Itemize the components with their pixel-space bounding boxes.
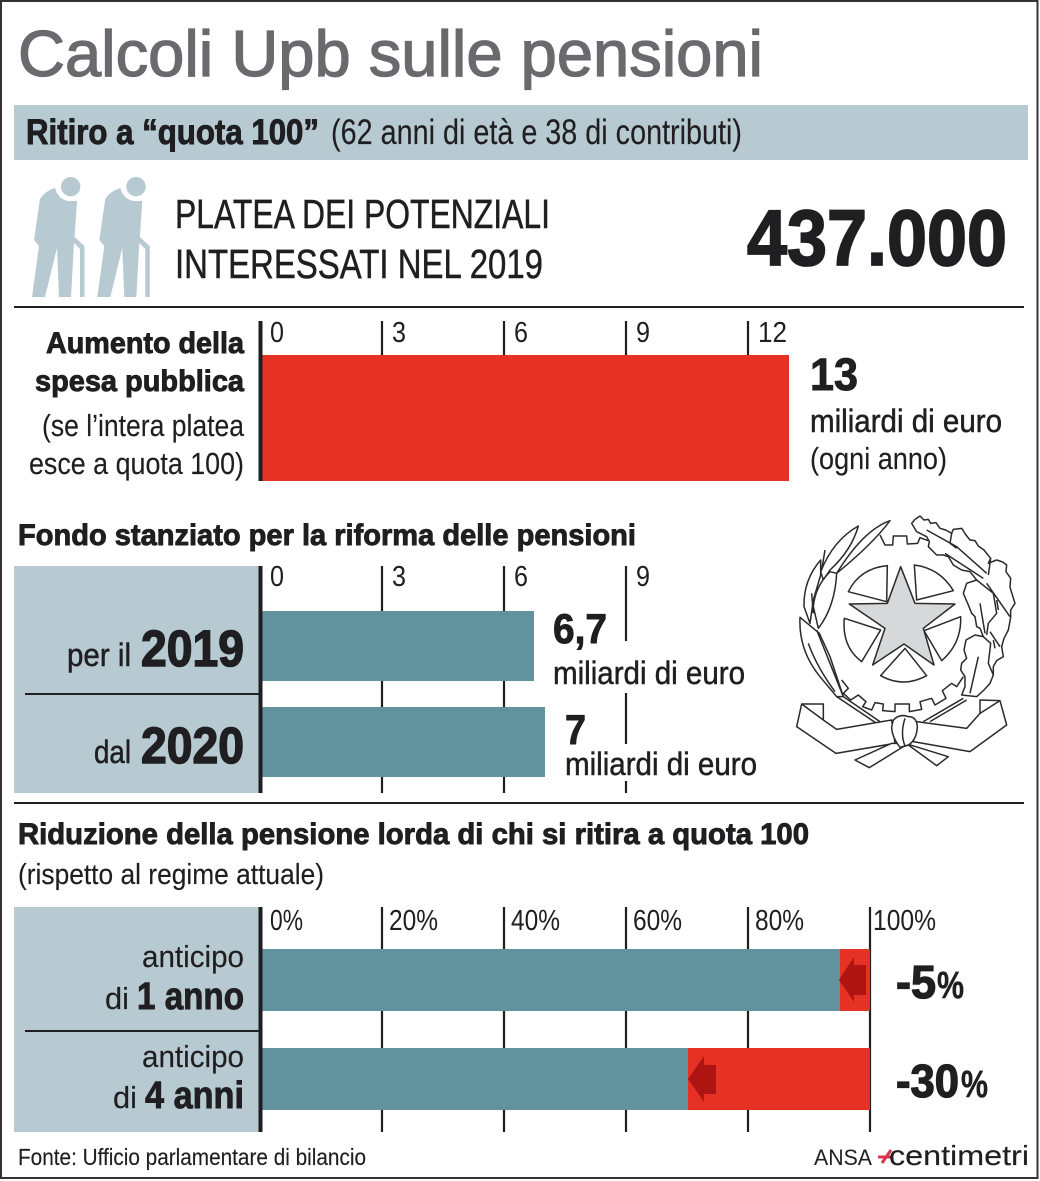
value: 13 miliardi: (ogni anno) — [810, 441, 947, 476]
panel: anticipo labels: 1 anno — [137, 976, 244, 1018]
value: 6,7 miliardi — [553, 605, 745, 691]
value: -30%: % — [961, 1064, 988, 1106]
title: Calcoli Upb sulle pensioni — [18, 17, 763, 90]
bar chart: fondo: 3 — [392, 561, 406, 593]
big number: 437.000 — [747, 193, 1007, 282]
bar chart: riduzione pensione: 100% — [873, 905, 936, 937]
heading: riduzione della pensione — [18, 818, 809, 891]
logo: ANSA Centimetri: centimetri — [889, 1140, 1029, 1171]
value: 13 miliardi — [810, 349, 1002, 476]
value: -5%: -5 — [896, 956, 936, 1008]
bar chart: spesa pubblica — [260, 317, 789, 481]
subtitle band: Ritiro a “quota 100” — [26, 113, 319, 152]
heading: riduzione della pensione: Riduzione della pensione lorda di chi si ritira a quota 100 — [18, 818, 809, 851]
bar chart: fondo: 0 — [270, 561, 284, 593]
text block: aumento della spesa pubblica: Aumento della — [46, 327, 244, 360]
panel: anticipo labels: di — [105, 981, 129, 1016]
subtitle band — [14, 105, 1028, 160]
bar chart: riduzione pensione — [260, 905, 936, 1132]
text block: aumento della spesa pubblica: (se l’intera platea — [42, 408, 245, 443]
bar chart: spesa pubblica: 3 — [392, 317, 406, 349]
text block: aumento della spesa pubblica: spesa pubblica — [35, 365, 244, 398]
value: -5% — [896, 956, 964, 1008]
icon: two elderly people with canes — [32, 177, 150, 297]
heading: platea — [175, 191, 550, 287]
bar chart: fondo: 6 — [514, 561, 528, 593]
source: Fonte: Ufficio parlamentare di bilancio — [18, 1144, 366, 1170]
logo: ANSA Centimetri — [814, 1140, 1029, 1171]
panel: fondo labels: dal — [94, 734, 131, 770]
bar chart: spesa pubblica: 0 — [270, 317, 284, 349]
value: -5%: % — [937, 965, 964, 1007]
arrow: 4 anni — [688, 1056, 716, 1102]
heading: riduzione della pensione: (rispetto al regime attuale) — [18, 859, 324, 891]
text block: aumento della spesa pubblica — [29, 327, 245, 481]
icon: emblem of the Italian Republic — [797, 516, 1015, 768]
heading: fondo stanziato: Fondo stanziato per la riforma delle pensioni — [18, 519, 636, 552]
bar chart: fondo: 9 — [636, 561, 650, 593]
panel: fondo labels — [14, 566, 259, 793]
panel: fondo labels: 2019 — [141, 620, 244, 677]
value: 7 miliardi — [565, 706, 757, 782]
panel: anticipo labels: 4 anni — [145, 1075, 244, 1117]
bar chart: spesa pubblica: 6 — [514, 317, 528, 349]
value: 6,7 miliardi: 6,7 — [553, 605, 607, 652]
value: -30%: -30 — [896, 1055, 959, 1107]
value: 13 miliardi: miliardi di euro — [810, 403, 1002, 439]
value: 13 miliardi: 13 — [810, 349, 858, 400]
bar chart: spesa pubblica: 12 — [758, 317, 787, 349]
bar chart: riduzione pensione: 60% — [633, 905, 682, 937]
heading: platea: PLATEA DEI POTENZIALI — [175, 191, 550, 237]
bar chart: riduzione pensione: 0% — [270, 905, 303, 937]
value: 7 miliardi: 7 — [565, 706, 586, 753]
text block: aumento della spesa pubblica: esce a quota 100) — [29, 446, 244, 481]
bar chart: riduzione pensione: 20% — [389, 905, 438, 937]
logo: ANSA Centimetri: ANSA — [814, 1145, 872, 1170]
bar chart: fondo — [260, 561, 650, 793]
subtitle band: (62 anni di età e 38 di contributi) — [331, 113, 742, 152]
panel: anticipo labels — [14, 907, 259, 1132]
heading: platea: INTERESSATI NEL 2019 — [175, 241, 543, 287]
value: 7 miliardi: miliardi di euro — [565, 746, 757, 782]
value: 6,7 miliardi: miliardi di euro — [553, 655, 745, 691]
panel: anticipo labels: anticipo — [142, 1039, 244, 1074]
panel: anticipo labels: anticipo — [142, 939, 244, 974]
bar chart: riduzione pensione: 40% — [511, 905, 560, 937]
bar chart: spesa pubblica: 9 — [636, 317, 650, 349]
panel: fondo labels: per il — [67, 637, 131, 673]
panel: anticipo labels: di — [113, 1080, 137, 1115]
bar chart: riduzione pensione: 80% — [755, 905, 804, 937]
arrow: 1 anno — [839, 957, 866, 1002]
panel: fondo labels: 2020 — [141, 717, 244, 774]
